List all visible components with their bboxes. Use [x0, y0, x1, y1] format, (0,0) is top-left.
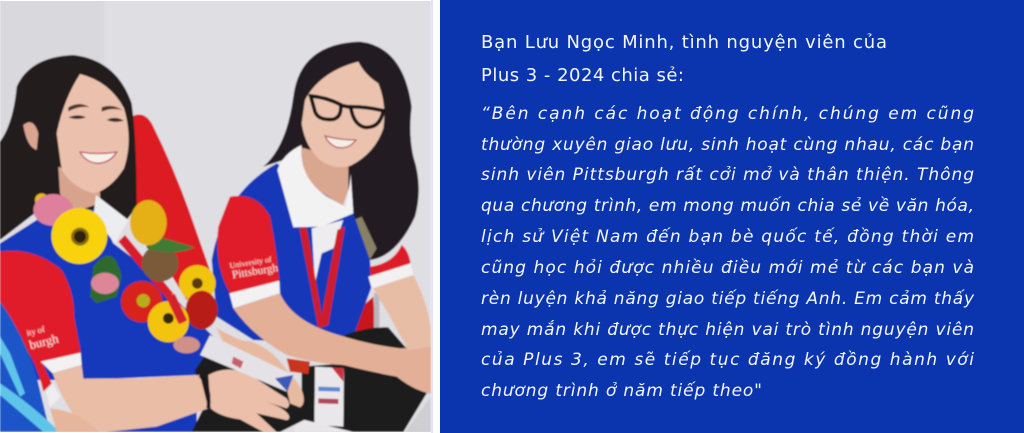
panel: blue quote background	[440, 0, 1024, 433]
speaker attribution	[481, 32, 887, 86]
red sleeve	[0, 251, 81, 392]
italic quote: lịch sử Việt Nam đến bạn bè quốc tế, đồng thời em	[481, 226, 974, 247]
right hand	[208, 370, 289, 432]
lanyard card	[200, 335, 293, 392]
left student: burgh	[28, 331, 60, 352]
lanyard	[299, 227, 345, 328]
italic quote: cũng học hỏi được nhiều điều mới mẻ từ các bạn và	[481, 257, 974, 278]
italic quote: của Plus 3, em sẽ tiếp tục đăng ký đồng hành với	[481, 349, 974, 370]
left hand fingers	[217, 328, 304, 407]
right student	[212, 42, 431, 432]
face	[302, 62, 384, 167]
dark bag	[302, 327, 431, 432]
photo: two student volunteers in polo shirts	[0, 0, 433, 433]
italic quote: rèn luyện khả năng giao tiếp tiếng Anh. Em cảm thấy	[481, 288, 975, 309]
italic quote: may mắn khi được thực hiện vai trò tình nguyện viên	[481, 319, 974, 340]
italic quote: thường xuyên giao lưu, sinh hoạt cùng nhau, các bạn	[481, 135, 974, 155]
collar	[93, 195, 128, 243]
white collar	[277, 145, 353, 227]
italic quote	[481, 104, 975, 401]
italic quote: chương trình ở năm tiếp theo"	[481, 380, 762, 401]
hair back	[263, 42, 419, 260]
left student	[0, 55, 304, 432]
sleeve logo: University of	[229, 255, 273, 270]
forearm	[53, 365, 208, 432]
red chair	[132, 114, 213, 300]
neck	[300, 146, 350, 206]
neighbouring student shoulder	[0, 302, 50, 432]
chair leg piece	[287, 358, 310, 374]
flower garland	[33, 193, 218, 353]
red sleeve	[217, 196, 279, 293]
dark bag under hand	[191, 356, 304, 432]
hair	[0, 55, 137, 240]
name badge	[314, 367, 344, 427]
smile	[80, 152, 117, 163]
right student: Pittsburgh	[231, 262, 279, 281]
sleeve logo: ity of	[25, 324, 46, 338]
neck	[58, 167, 100, 213]
wrist band	[200, 375, 209, 408]
italic quote: “Bên cạnh các hoạt động chính, chúng em cũng	[481, 104, 974, 124]
right arm	[233, 293, 431, 394]
speaker attribution: Bạn Lưu Ngọc Minh, tình nguyện viên của	[481, 32, 887, 53]
glasses	[311, 96, 383, 127]
italic quote: qua chương trình, em mong muốn chia sẻ về văn hóa,	[481, 195, 974, 216]
wall background	[0, 0, 431, 433]
face	[57, 74, 129, 193]
speaker attribution: Plus 3 - 2024 chia sẻ:	[481, 65, 684, 86]
italic quote: sinh viên Pittsburgh rất cởi mở và thân thiện. Thông	[481, 164, 974, 185]
smile	[325, 136, 356, 148]
lanyard	[118, 235, 173, 298]
white lower sleeve cuff	[46, 384, 60, 406]
ear	[23, 122, 38, 150]
blue polo	[212, 163, 372, 343]
blue polo	[0, 208, 213, 380]
